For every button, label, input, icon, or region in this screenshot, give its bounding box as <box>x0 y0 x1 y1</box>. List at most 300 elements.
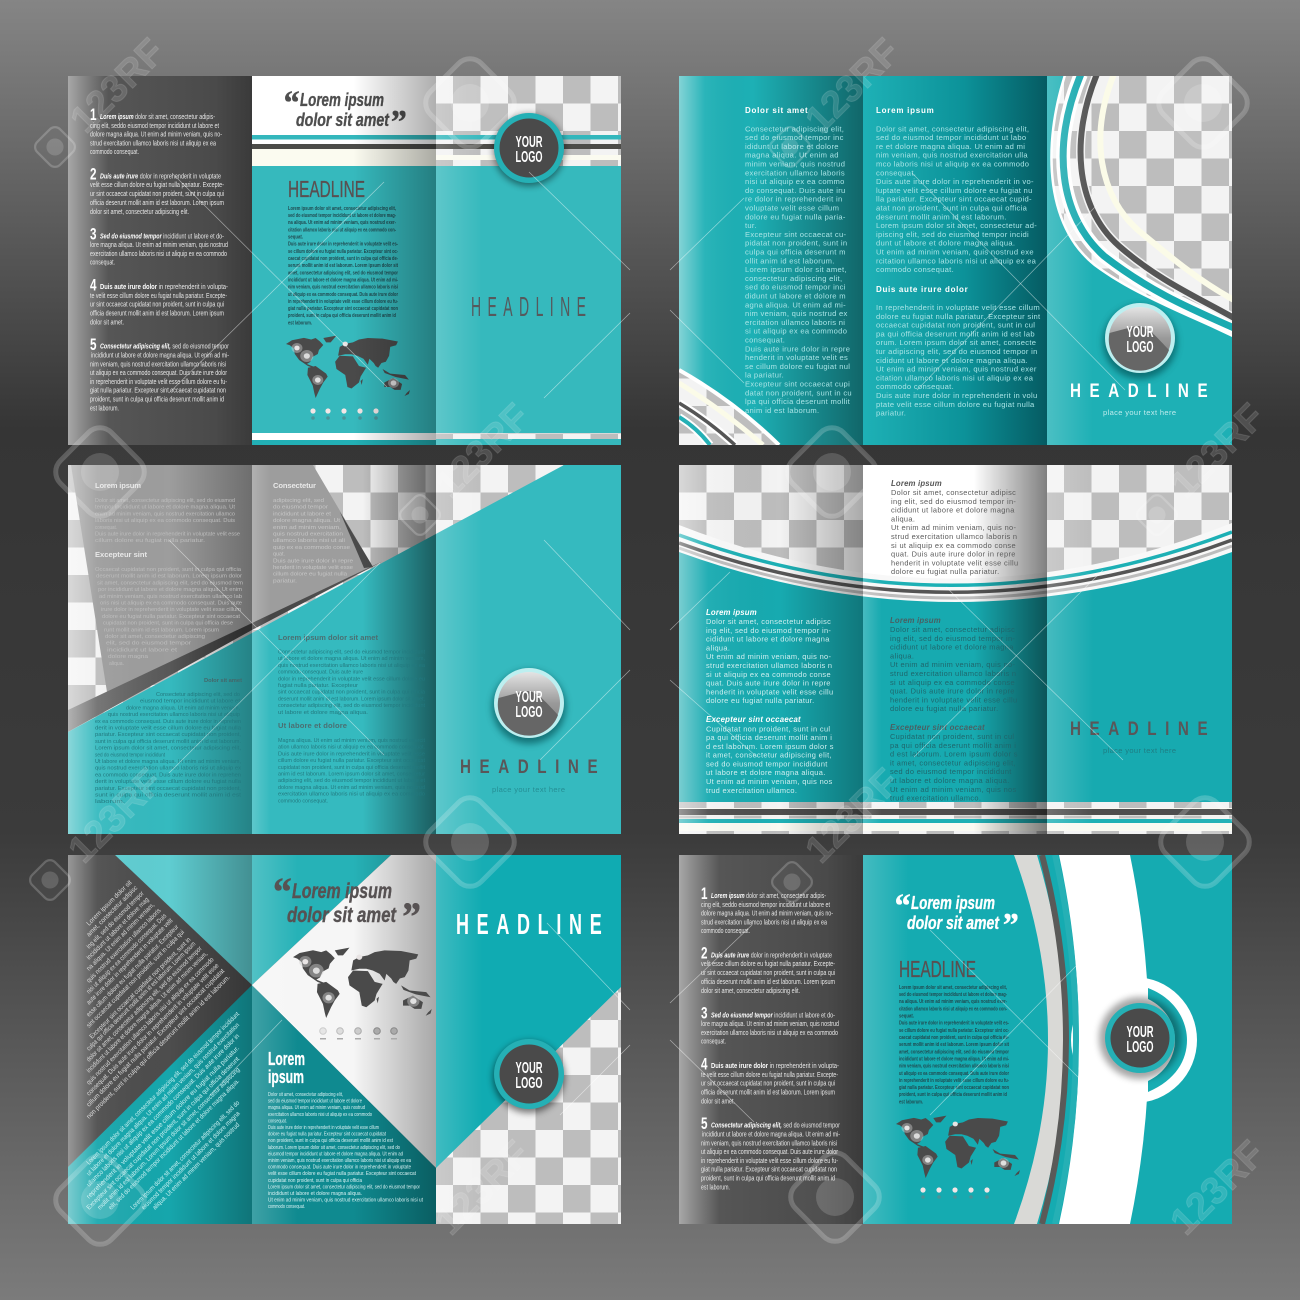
panel: numbered list: ur sint occaecat cupidatat non proident, sunt in culpa qui <box>701 1079 835 1088</box>
panel: teal text left: la pariatur. <box>745 371 784 380</box>
panel: teal text left: se cillum dolore eu fugiat nul <box>745 362 850 371</box>
panel text: teal left: Lorem ipsum dolor sit amet, consectetur adipiscing elit, <box>95 746 241 752</box>
panel text: teal middle: Ut labore et dolore <box>278 721 347 730</box>
panel text: gray area middle: Consectetur <box>273 481 316 490</box>
panel text: left: trud exercitation ullamco. <box>706 786 797 795</box>
panel text: middle bottom: henderit in voluptate velit esse cillu <box>890 695 1018 704</box>
panel: teal text left <box>679 76 863 445</box>
body text: proident, sunt in culpa qui officia deserunt mollit anim id <box>288 313 396 319</box>
panel text: teal left: sunt in culpa qui officia deserunt mollit anim id est laborum. <box>95 739 241 745</box>
panel text: middle bottom: quat. Duis aute irure dolor in repre <box>890 687 1015 696</box>
panel text: gray area middle: quip ex ea commodo conse <box>273 545 350 551</box>
panel text: middle top: Dolor sit amet, consectetur adipisc <box>891 488 1016 497</box>
body text: Lorem ipsum dolor sit amet, consectetur adipiscing elit, <box>288 206 396 212</box>
logo: YOUR <box>516 1060 542 1077</box>
panel text: left: Lorem ipsum <box>706 608 757 617</box>
body text: minim veniam, quis nostrud exercitation ullamco laboris nisi ut aliquip ex ea <box>268 1158 412 1164</box>
logo: YOUR <box>1126 324 1154 341</box>
rotated text on gray: consequat. Duis aute irure dolor in reprehenderit in voluptate velit esse <box>85 962 221 1097</box>
panel text: left: si ut aliquip ex ea commodo conse <box>706 670 831 679</box>
panel: numbered list: strud exercitation ullamco laboris nisi ut aliquip ex ea <box>701 917 828 926</box>
panel: numbered list: commodo consequat. <box>90 147 139 156</box>
panel text: gray area left: consequat. <box>95 525 117 531</box>
panel: teal text middle: ipiscing elit, sed do eiusmod tempor incidi <box>876 230 1029 239</box>
panel text: middle bottom: dolore eu fugiat nulla pariatur. <box>890 704 999 713</box>
teal field <box>68 465 621 834</box>
logo <box>1103 303 1177 379</box>
light teal triangle <box>115 855 252 985</box>
panel text: middle bottom: Dolor sit amet, consectetur adipisc <box>890 625 1015 634</box>
dark wedges <box>68 512 383 732</box>
legend dots <box>320 1028 397 1040</box>
panel: teal text left: consectetur adipiscing elit, <box>745 274 842 283</box>
panel text: teal left: dolore magna aliqua. Ut enim ad minim veniam, <box>126 705 240 711</box>
rotated text on gray: culpa qui officia deserunt mollit anim id est laborum. Lorem ipsum <box>85 940 197 1052</box>
panel text: middle bottom: pa qui officia deserunt mollit anim i <box>890 741 1016 750</box>
panel text: middle bottom: sed do eiusmod tempor incididunt <box>890 767 1012 776</box>
panel text: left: Ut enim ad minim veniam, quis no- <box>706 652 832 661</box>
panel text: gray area middle: incididunt ut labore et <box>273 511 331 517</box>
body text: serunt mollit anim id est laborum. Lorem ipsum dolor sit <box>288 263 398 269</box>
checker sky <box>679 465 1232 573</box>
panel: teal text middle: Duis aute irure dolor in reprehenderit in volu <box>876 391 1038 400</box>
panel: teal text middle: rcitation ullamco laboris nisi ut aliquip ex ea <box>876 256 1037 265</box>
panel: teal text middle: atat non proident, sunt in culpa qui officia <box>876 204 1028 212</box>
panel text: gray area middle: quis nostrud exercitation <box>273 532 343 538</box>
body text: se cillum dolore eu fugiat nulla pariatur. Excepteur sint oc- <box>899 1028 1009 1034</box>
panel: numbered list: proident, sunt in culpa qui officia deserunt mollit anim id <box>701 1174 835 1183</box>
panel text: middle top: dolore eu fugiat nulla pariatur. <box>891 567 1000 576</box>
headline: HEADLINE <box>471 291 586 322</box>
panel: cover with headline <box>436 76 621 445</box>
heading Lorem ipsum: Lorem <box>268 1049 305 1069</box>
panel text: teal left: laborum. <box>95 799 126 805</box>
brochure 6: dark list with curved white band <box>679 855 1232 1224</box>
body text: Ut enim ad minim veniam, quis nostrud exercitation ullamco laboris nisi ut <box>268 1198 423 1204</box>
panel text: gray area middle: do eiusmod tempor <box>273 505 328 511</box>
panel: numbered list: te velit esse cillum dolore eu fugiat nulla pariatur. Excepte- <box>701 1070 838 1079</box>
quote: ” <box>400 894 420 939</box>
panel: teal text middle: sed do eiusmod tempor incididunt ut labo <box>876 133 1026 142</box>
rotated text on gray: incididunt ut labore et dolore magna aliqua. Ut enim ad minim veniam, <box>85 951 209 1074</box>
panel: teal text middle: lla pariatur. Excepteur sint occaecat cupid- <box>876 195 1032 204</box>
panel text: middle bottom: ing elit, sed do eiusmod tempor in- <box>890 634 1015 643</box>
panel text: middle bottom: cididunt ut labore et dolore magna <box>890 643 1014 652</box>
panel text: left: cididunt ut labore et dolore magna <box>706 635 830 644</box>
panel: teal text middle: luptate velit esse cillum dolore eu fugiat nu <box>876 186 1033 195</box>
panel text: teal left: derit in voluptate velit esse cillum dolore eu fugiat nulla <box>95 779 242 785</box>
panel text: teal middle: Consectetur adipiscing elit, sed do eiusmod tempor incididunt <box>278 650 425 656</box>
body text: caecat cupidatat non proident, sunt in culpa qui officia de- <box>899 1035 1009 1041</box>
panel: teal text left: minim veniam, quis nostrud <box>745 160 845 168</box>
rotated text on teal: ut labore et dolore magna aliqua. Ut enim ad minim veniam, quis nostrud exercitation <box>85 1022 241 1177</box>
curved corner <box>679 370 779 445</box>
rotated text on gray: non proident, sunt in culpa qui officia deserunt mollit anim id est laborum. <box>85 974 232 1120</box>
panel: teal text middle: Lorem ipsum <box>876 106 934 115</box>
panel: teal text middle: Duis aute irure dolor in reprehenderit in vo- <box>876 177 1034 186</box>
panel: teal text middle: Lorem ipsum dolor sit amet, consectetur ad- <box>876 221 1037 230</box>
panel: numbered list <box>68 76 252 445</box>
panel text: teal left: sunt in culpa qui officia deserunt mollit anim id est <box>95 792 242 798</box>
panel: numbered list: officia deserunt mollit anim id est laborum. Lorem ipsum <box>701 977 835 986</box>
panel text: gray area left: Dolor sit amet, consectetur adipiscing elit, sed do eiusmod <box>95 498 235 504</box>
panel text: teal middle: cupidatat non proident, sunt in culpa qui officia deserunt mollit <box>278 765 425 771</box>
panel: teal text left: Excepteur sint occaecat cupi <box>745 380 850 388</box>
panel: teal text left: didunt ut labore et dolore m <box>745 292 846 300</box>
panel text: gray area middle: adipiscing elit, sed <box>273 498 324 504</box>
panel text: gray area left: cupidatat non proident, sunt in culpa qui officia dese <box>103 621 233 627</box>
body text: commodo consequat. Duis aute irure dolor in reprehenderit in voluptate <box>268 1165 411 1171</box>
rotated text on gray: aute irure dolor in reprehenderit in voluptate velit <box>85 917 175 1006</box>
panel: numbered list: Consectetur adipiscing elit, sed do eiusmod tempor <box>100 342 229 351</box>
panel: teal text middle: dolore eu fugiat nulla pariatur. Excepteur sint <box>876 312 1041 321</box>
panel: numbered list: officia deserunt mollit anim id est laborum. Lorem ipsum <box>90 198 224 207</box>
panel: teal text left: consequat. <box>745 336 785 344</box>
panel: numbered list: Duis aute irure dolor in reprehenderit in voluptate <box>100 171 221 180</box>
body text: giat nulla pariatur. Excepteur sint occaecat cupidatat non <box>288 306 398 312</box>
quote: Lorem ipsum <box>911 893 995 913</box>
body text: magna aliqua. Ut enim ad minim veniam, quis nostrud <box>268 1105 365 1111</box>
panel text: left: d est laborum. Lorem ipsum dolor s <box>706 742 834 751</box>
panel: teal text left: voluptate velit esse cillum <box>745 204 839 212</box>
headline: HEADLINE <box>899 956 976 982</box>
panel text: gray area left: oris nisi ut aliquip ex ea commodo consequat. Duis aute <box>100 600 242 606</box>
panel text: middle top: strud exercitation ullamco laboris n <box>891 532 1017 541</box>
panel text: teal middle: cillum dolore eu fugiat nulla pariatur. Excepteur sint occaecat <box>278 758 425 764</box>
rotated text on teal: Lorem ipsum dolor sit amet, consectetur adipiscing elit, sed do <box>129 1100 241 1211</box>
rotated text on gray: Lorem ipsum dolor sit <box>85 879 134 927</box>
rotated text on teal: elit, sed do eiusmod tempor incididunt ut labore et dolore magna aliqua. <box>107 1078 241 1211</box>
panel: numbered list: est laborum. <box>90 404 119 413</box>
panel text: teal left: pariatur. Excepteur sint occaecat cupidatat non proident, <box>95 732 241 738</box>
panel: numbered list: consequat. <box>701 1037 726 1046</box>
watermark text: 123RF <box>63 31 173 141</box>
rotated text on teal: Lorem ipsum dolor sit amet, consectetur adipiscing elit, sed do eiusmod tempor incididunt <box>85 1011 241 1166</box>
quote: “ <box>271 869 291 914</box>
panel: teal text middle: cididunt ut labore et dolore magna aliqua. <box>876 356 1028 365</box>
panel: numbered list: Duis aute irure dolor in reprehenderit in volupta- <box>711 1061 839 1070</box>
body text: Dolor sit amet, consectetur adipiscing elit, <box>268 1092 343 1098</box>
panel: numbered list: Consectetur adipiscing elit, sed do eiusmod tempor <box>711 1121 840 1130</box>
lower left teal <box>68 985 252 1224</box>
brochure 5: diagonal cross layout <box>68 855 621 1224</box>
panel: teal text middle: commodo consequat. <box>876 382 954 391</box>
body text: nim veniam, quis nostrud exercitation ullamco laboris nisi <box>899 1064 1009 1070</box>
panel: numbered list: in reprehenderit in voluptate velit esse cillum dolore eu fu- <box>701 1156 838 1165</box>
panel text: teal left: ea commodo consequat. Duis aute irure dolor in reprehen <box>95 772 241 778</box>
panel text: gray area middle: dolore magna aliqua. Ut <box>273 518 340 524</box>
panel text: teal middle: adipiscing elit, sed do eiusmod tempor incididunt ut labore et <box>278 778 425 784</box>
teal top mid <box>252 855 391 985</box>
panel: numbered list: lore magna aliqua. Ut enim ad minim veniam, quis nostrud <box>701 1019 839 1028</box>
panel text: left: ing elit, sed do eiusmod tempor in- <box>706 626 831 635</box>
lower mid teal <box>252 985 436 1224</box>
panel: numbered list: commodo consequat. <box>701 926 750 935</box>
panel text: left: aliqua. <box>706 643 730 652</box>
panel text: gray area middle: quat. <box>273 552 285 558</box>
body text: in reprehenderit in voluptate velit esse cillum dolore eu fu- <box>899 1078 1009 1084</box>
panel text: gray area middle <box>273 481 353 584</box>
panel text: teal left: Consectetur adipiscing elit, sed do <box>156 692 240 698</box>
body text: in reprehenderit in voluptate velit esse cillum dolore eu fu- <box>288 299 398 305</box>
body text: proident, sunt in culpa qui officia deserunt mollit anim id <box>899 1092 1007 1098</box>
body text: incididunt ut labore et dolore magna aliqua. <box>268 1191 362 1197</box>
body text: incididunt ut labore et dolore magna aliqua. Ut enim ad mi- <box>899 1056 1009 1062</box>
panel: numbered list: ur sint occaecat cupidatat non proident, sunt in culpa qui <box>701 968 835 977</box>
panel: teal text middle: mco laboris nisi ut aliquip ex ea commodo <box>876 160 1029 168</box>
panel: numbered list: velit esse cillum dolore eu fugiat nulla pariatur. Excepte- <box>90 180 224 189</box>
panel: teal text middle: nim veniam, quis nostrud exercitation ulla <box>876 151 1028 160</box>
panel: numbered list: 5 <box>701 1114 708 1133</box>
headline: HEADLINE <box>288 176 365 202</box>
panel text: gray area left: elit, sed do eiusmod tempor <box>106 641 191 647</box>
body text: sed do eiusmod tempor incididunt ut labore et dolore <box>268 1099 362 1105</box>
dark triangle <box>68 855 252 1167</box>
rotated text on gray: nisi ut aliquip ex ea commodo consequat. Duis <box>85 912 169 995</box>
tagline: place your text here <box>1103 408 1176 417</box>
body text: consequat. <box>268 1118 287 1124</box>
rotated text on gray: quis nostrud exercitation ullamco laboris nisi ut aliquip ex ea commodo <box>85 956 216 1086</box>
panel text: teal middle: ut labore et dolore magna aliqua. <box>278 710 368 716</box>
rotated text on teal: ullamco laboris nisi ut aliquip ex ea commodo consequat. Duis aute irure dolor in <box>85 1033 241 1188</box>
world map <box>293 948 432 1018</box>
legend dots <box>310 408 379 420</box>
quote: “ <box>282 85 299 122</box>
brochure 2: deep teal with curved stripes <box>679 74 1234 445</box>
body text: na aliqua. Ut enim ad minim veniam, quis nostrud exer- <box>288 220 396 226</box>
panel: teal text left: culpa qui officia deserunt m <box>745 248 846 256</box>
body text: velit esse cillum dolore eu fugiat nulla pariatur. Excepteur sint occaecat <box>268 1171 416 1177</box>
panel text: teal left: sed do eiusmod tempor incididunt <box>95 752 165 758</box>
logo: LOGO <box>516 1075 542 1092</box>
body text: se cillum dolore eu fugiat nulla pariatur. Excepteur sint oc- <box>288 249 398 255</box>
panel: teal text middle: occaecat cupidatat non proident, sunt in cul <box>876 321 1035 330</box>
panel: numbered list: incididunt ut labore et dolore magna aliqua. Ut enim ad mi- <box>702 1129 840 1138</box>
panel text: teal middle: ut labore et dolore magna aliqua. Ut enim ad minim veniam, <box>278 656 425 662</box>
panel text: teal left: Dolor sit amet <box>204 678 242 684</box>
panel text: gray area left: dolor sit amet, consectetur adipiscing <box>105 634 205 640</box>
panel text: teal left <box>95 678 242 805</box>
panel text: gray area left: por incididunt ut labore et dolore magna aliqua. Ut enim <box>98 587 242 593</box>
panel text: gray area middle: Duis aute irure dolor in repre <box>273 558 353 564</box>
panel: numbered list: ut aliquip ex ea commodo consequat. Duis aute irure dolor <box>701 1147 838 1156</box>
body text: na aliqua. Ut enim ad minim veniam, quis nostrud exer- <box>899 999 1007 1005</box>
panel text: left: Excepteur sint occaecat <box>706 715 801 724</box>
panel text: middle top: henderit in voluptate velit esse cillu <box>891 558 1019 567</box>
panel text: middle bottom: d est laborum. Lorem ipsum dolor s <box>890 750 1018 759</box>
panel: teal text left: ercitation ullamco laboris ni <box>745 318 845 327</box>
panel: teal text left: nisi ut aliquip ex ea commo <box>745 177 845 186</box>
panel: cover with curved checker <box>1047 74 1234 445</box>
panel: teal text left: exercitation ullamco laboris <box>745 168 845 177</box>
cover teal <box>436 855 621 1168</box>
panel text: gray area left: Lorem ipsum <box>95 481 141 490</box>
panel: teal text middle: deserunt mollit anim id est laborum. <box>876 212 1007 221</box>
panel text: middle bottom: trud exercitation ullamco. <box>890 794 981 803</box>
logo <box>493 1039 565 1113</box>
body text: caecat cupidatat non proident, sunt in culpa qui officia de- <box>288 256 398 262</box>
panel text: teal left: derit in voluptate velit esse cillum dolore eu fugiat nulla <box>95 726 242 732</box>
panel: numbered list: 1 <box>701 884 708 903</box>
panel: numbered list: consequat. <box>90 258 115 267</box>
panel: teal text middle: Dolor sit amet, consectetur adipiscing elit, <box>876 124 1029 133</box>
panel: numbered list: Duis aute irure dolor in reprehenderit in voluptate <box>711 950 832 959</box>
body text: Duis aute irure dolor in reprehenderit in voluptate velit es- <box>899 1021 1009 1027</box>
rotated text on gray <box>85 879 232 1120</box>
panel: teal text left: henderit in voluptate velit es <box>745 353 848 362</box>
quote: “ <box>893 888 910 925</box>
panel text: gray area left: ad minim veniam, quis nostrud exercitation ullamco lab <box>99 594 242 600</box>
panel text: gray area left <box>95 481 243 667</box>
panel text: left: Ut enim ad minim veniam, quis nos <box>706 777 833 786</box>
panel: numbered list: incididunt ut labore et dolore magna aliqua. Ut enim ad mi- <box>91 350 229 359</box>
quote <box>271 869 420 939</box>
panel text: teal middle <box>278 633 426 804</box>
panel text: teal middle: exercitation ullamco laboris nisi ut aliquip ex ea commodo <box>278 792 425 798</box>
panel: teal text left: Excepteur sint occaecat cu- <box>745 230 847 239</box>
panel: numbered list: in reprehenderit in voluptate velit esse cillum dolore eu fu- <box>90 377 227 386</box>
panel: numbered list: Duis aute irure dolor in reprehenderit in volupta- <box>100 282 228 291</box>
logo: LOGO <box>1126 1039 1154 1056</box>
panel: numbered list: Lorem ipsum dolor sit amet, consectetur adipis- <box>100 112 215 121</box>
panel text: middle bottom: strud exercitation ullamco laboris n <box>890 669 1016 678</box>
panel: teal text left: magna aliqua. Ut enim ad <box>745 151 839 160</box>
panel text: teal middle: dolor in reprehenderit in voluptate velit esse cillum dolore eu <box>278 676 425 682</box>
body text: citation ullamco laboris nisi ut aliquip ex ea commodo con- <box>288 228 396 234</box>
body text: dolore eu fugiat nulla pariatur. Excepteur sint occaecat cupidatat <box>268 1132 386 1138</box>
quote: Lorem ipsum <box>300 90 384 110</box>
panel text: gray area left: aliqua. <box>109 661 124 667</box>
panel text: teal middle: quis nostrud exercitation ullamco laboris nisi ut aliquip ex ea <box>278 663 426 669</box>
body text: non proident, sunt in culpa qui officia deserunt mollit anim id est <box>268 1138 393 1144</box>
panel: numbered list: dolor sit amet, consectetur adipiscing elit. <box>90 207 189 216</box>
headline: HEADLINE <box>460 755 598 777</box>
panel text: teal middle: anim id est laborum. Lorem ipsum dolor sit amet, consectetur <box>278 772 425 778</box>
body text: ut aliquip ex ea commodo consequat. Duis aute irure dolor <box>899 1071 1010 1077</box>
panel text: middle top: cididunt ut labore et dolore magna <box>891 506 1015 515</box>
logo: YOUR <box>1126 1024 1154 1041</box>
rotated text on gray: esse cillum dolore eu fugiat nulla pariatur. Excepteur <box>85 923 181 1018</box>
panel: numbered list: proident, sunt in culpa qui officia deserunt mollit anim id <box>90 395 224 404</box>
panel: teal text middle: commodo consequat. <box>876 265 954 274</box>
panel text: gray area left: sit amet, consectetur adipiscing elit, sed do eiusmod tem <box>97 580 243 586</box>
rotated text on gray: na aliqua. Ut enim ad minim veniam, <box>85 902 156 972</box>
panel: teal text left: nim veniam, quis nostrud ex <box>745 309 848 318</box>
body text: cupidatat non proident, sunt in culpa qui officia <box>268 1178 363 1184</box>
panel: numbered list: dolor sit amet. <box>90 318 124 327</box>
panel text: gray area left: tempor incididunt ut labore et dolore magna aliqua. Ut <box>95 505 235 511</box>
panel: numbered list: ur sint occaecat cupidatat non proident, sunt in culpa qui <box>90 189 224 198</box>
body text: Lorem ipsum dolor sit amet, consectetur adipiscing elit, <box>899 985 1007 991</box>
panel: teal text middle: pariatur. <box>876 409 906 418</box>
panel text: teal middle: ation ullamco laboris nisi ut aliquip ex ea commodo consequat. <box>278 745 425 751</box>
watermark text: 123RF <box>1163 396 1273 506</box>
curved white band <box>1014 855 1197 1224</box>
panel: teal text left: lpa qui officia deserunt mollit <box>745 397 851 406</box>
bottom stripes <box>679 802 1232 834</box>
panel: numbered list: giat nulla pariatur. Excepteur sint occaecat cupidatat non <box>90 386 226 395</box>
body text <box>268 1092 423 1210</box>
tagline: place your text here <box>492 785 565 794</box>
panel: teal text middle: orum. Lorem ipsum dolor sit amet, consecte <box>876 338 1036 347</box>
panel: quote, headline and map <box>252 76 436 445</box>
rotated text on gray: quis nostrud exercitation ullamco laboris <box>85 907 163 984</box>
headline: HEADLINE <box>456 909 602 941</box>
panel text: gray area left: Duis aute irure dolor in reprehenderit in voluptate velit esse <box>95 532 240 538</box>
panel text: middle top <box>891 479 1019 576</box>
panel text: gray area left: irure dolor in reprehenderit in voluptate velit esse cillum <box>101 607 241 613</box>
panel: teal text left: datat non proident, sunt in cu <box>745 388 852 397</box>
tagline: place your text here <box>1103 746 1176 755</box>
panel: teal text middle: ptate velit esse cillum dolore eu fugiat nulla <box>876 400 1035 409</box>
body text: giat nulla pariatur. Excepteur sint occaecat cupidatat non <box>899 1085 1009 1091</box>
rotated text on gray: ing elit, sed do eiusmod tempor <box>85 890 146 950</box>
body text: Lorem ipsum dolor sit amet, consectetur adipiscing elit, sed do eiusmod tempor <box>268 1184 420 1190</box>
panel text: teal middle: fugiat nulla pariatur. Excepteur <box>278 683 358 689</box>
panel text: teal left: quis nostrud exercitation ullamco laboris nisi ut aliquip <box>108 712 240 718</box>
panel text: gray area middle: enim ad minim veniam, <box>273 525 342 531</box>
panel text: left: pa qui officia deserunt mollit anim i <box>706 733 832 742</box>
logo: LOGO <box>516 149 542 166</box>
quote: dolor sit amet <box>907 913 1000 933</box>
panel text: teal middle: commodo consequat. <box>278 798 328 804</box>
body text: incididunt ut labore et dolore magna aliqua. Ut enim ad mi- <box>288 278 398 284</box>
quote: dolor sit amet <box>287 904 397 927</box>
panel: numbered list: exercitation ullamco laboris nisi ut aliquip ex ea commodo <box>90 249 227 258</box>
panel: teal text left: pidatat non proident, sunt in <box>745 239 847 248</box>
panel: numbered list: ut aliquip ex ea commodo consequat. Duis aute irure dolor <box>90 368 227 377</box>
body text: sed do eiusmod tempor incididunt ut labore et dolore mag- <box>899 992 1007 998</box>
quote: ” <box>1001 907 1018 944</box>
panel: numbered list: 2 <box>90 164 96 184</box>
body text: amet, consectetur adipiscing elit, sed do eiusmod tempor <box>899 1049 1010 1055</box>
panel: numbered list: dolore magna aliqua. Ut enim ad minim veniam, quis no- <box>701 909 833 918</box>
heading Lorem ipsum: ipsum <box>268 1067 304 1087</box>
panel: teal text middle: pa qui officia deserunt mollit anim id est lab <box>876 329 1035 338</box>
panel: teal text left: Dolor sit amet <box>745 106 808 115</box>
panel: teal text left: sed do eiusmod tempor inci <box>745 283 846 292</box>
panel text: teal middle: deserunt mollit anim id est laborum. Lorem ipsum dolor sit amet, <box>278 696 425 702</box>
panel text: middle top: aliqua. <box>891 514 915 523</box>
panel text: gray area middle: pariatur. <box>273 578 298 584</box>
panel: teal text left: ididunt ut labore et dolore <box>745 142 839 151</box>
panel text: left: sed do eiusmod tempor incididunt <box>706 759 828 768</box>
panel text: middle bottom: Ut enim ad minim veniam, quis no- <box>890 660 1016 669</box>
panel: teal text left: ollit anim id est laborum. <box>745 256 835 265</box>
body text: ut aliquip ex ea commodo consequat. Duis aute irure dolor <box>288 292 399 298</box>
teal base <box>863 855 1232 1224</box>
panel text: middle bottom: ut labore et dolore magna aliqua. <box>890 776 1010 785</box>
panel: numbered list: est laborum. <box>701 1183 730 1192</box>
panel text: left: dolore eu fugiat nulla pariatur. <box>706 696 815 705</box>
panel: numbered list: 3 <box>90 224 96 244</box>
panel: numbered list: exercitation ullamco laboris nisi ut aliquip ex ea commodo <box>701 1028 838 1037</box>
white triangle <box>252 855 436 1168</box>
panel: teal text left: Consectetur adipiscing elit, <box>745 124 844 133</box>
panel: teal text left: si ut aliquip ex ea commodo <box>745 327 847 336</box>
panel text: gray area middle: ullamco laboris nisi ut ali <box>273 538 345 544</box>
body text: est laborum. <box>288 320 312 326</box>
panel text: teal middle: consectetur adipiscing elit, sed do eiusmod tempor incididunt <box>278 703 425 709</box>
panel text: left: it amet, consectetur adipiscing elit, <box>706 751 832 760</box>
body text: exercitation ullamco laboris nisi ut aliquip ex ea commodo <box>268 1112 372 1118</box>
panel: numbered list: officia deserunt mollit anim id est laborum. Lorem ipsum <box>701 1088 835 1097</box>
rotated text on gray: Excepteur sint occaecat cupidatat non proident, sunt in <box>88 936 193 1040</box>
panel: numbered list: nim veniam, quis nostrud exercitation ullamco laboris nisi <box>90 359 226 368</box>
logo <box>493 113 565 186</box>
watermark text: 123RF <box>428 1133 538 1243</box>
brochure 1: dark numbered list with teal headline <box>68 76 621 445</box>
